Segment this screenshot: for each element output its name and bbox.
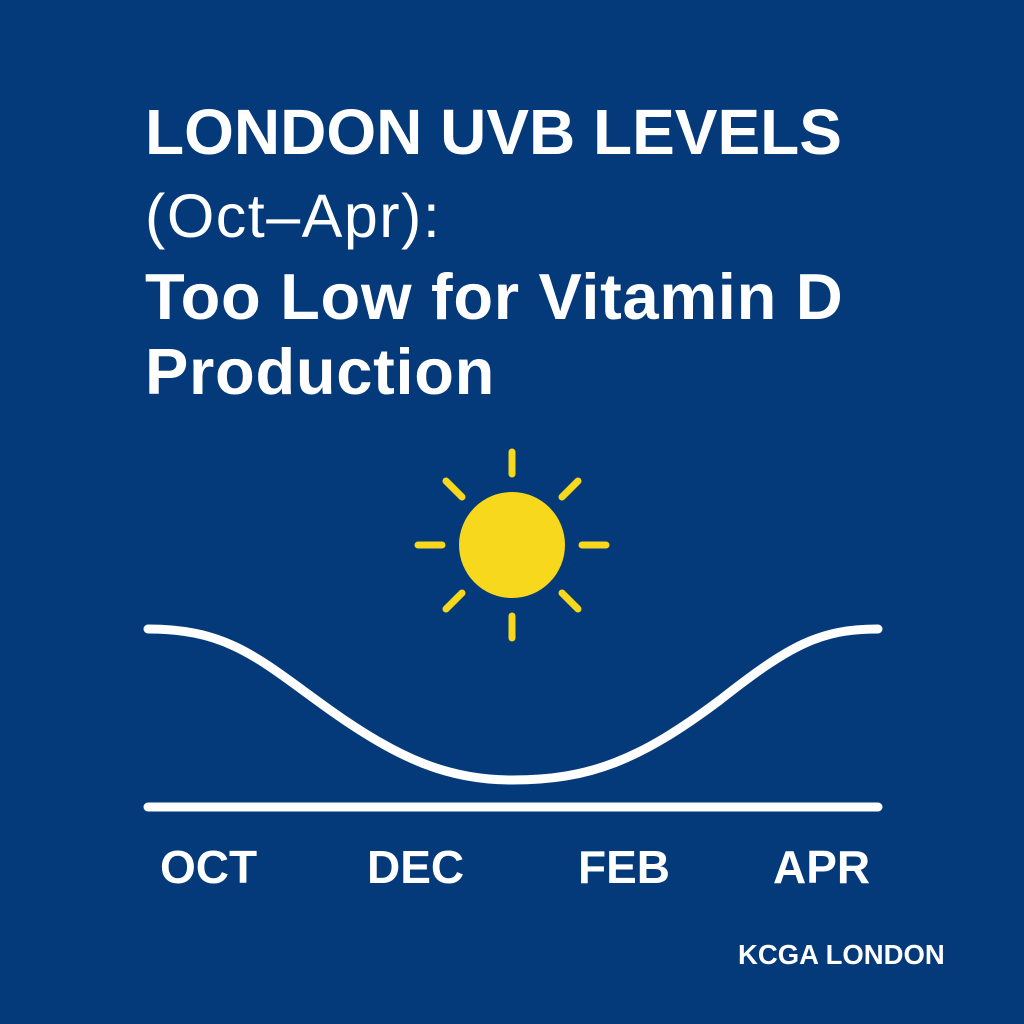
title line 3: Too Low for Vitamin D bbox=[145, 260, 843, 333]
curve bbox=[148, 629, 878, 780]
month label APR: APR bbox=[773, 841, 870, 893]
title line 2: (Oct–Apr): bbox=[145, 182, 441, 250]
axis bbox=[148, 802, 878, 812]
month label FEB: FEB bbox=[578, 841, 670, 893]
title line 1: LONDON UVB LEVELS bbox=[145, 96, 842, 168]
month label OCT: OCT bbox=[160, 841, 257, 893]
icon: sun bbox=[418, 452, 606, 638]
title bbox=[145, 96, 843, 408]
title line 4: Production bbox=[145, 335, 495, 408]
footer brand: KCGA LONDON bbox=[738, 939, 945, 970]
month label DEC: DEC bbox=[367, 841, 464, 893]
